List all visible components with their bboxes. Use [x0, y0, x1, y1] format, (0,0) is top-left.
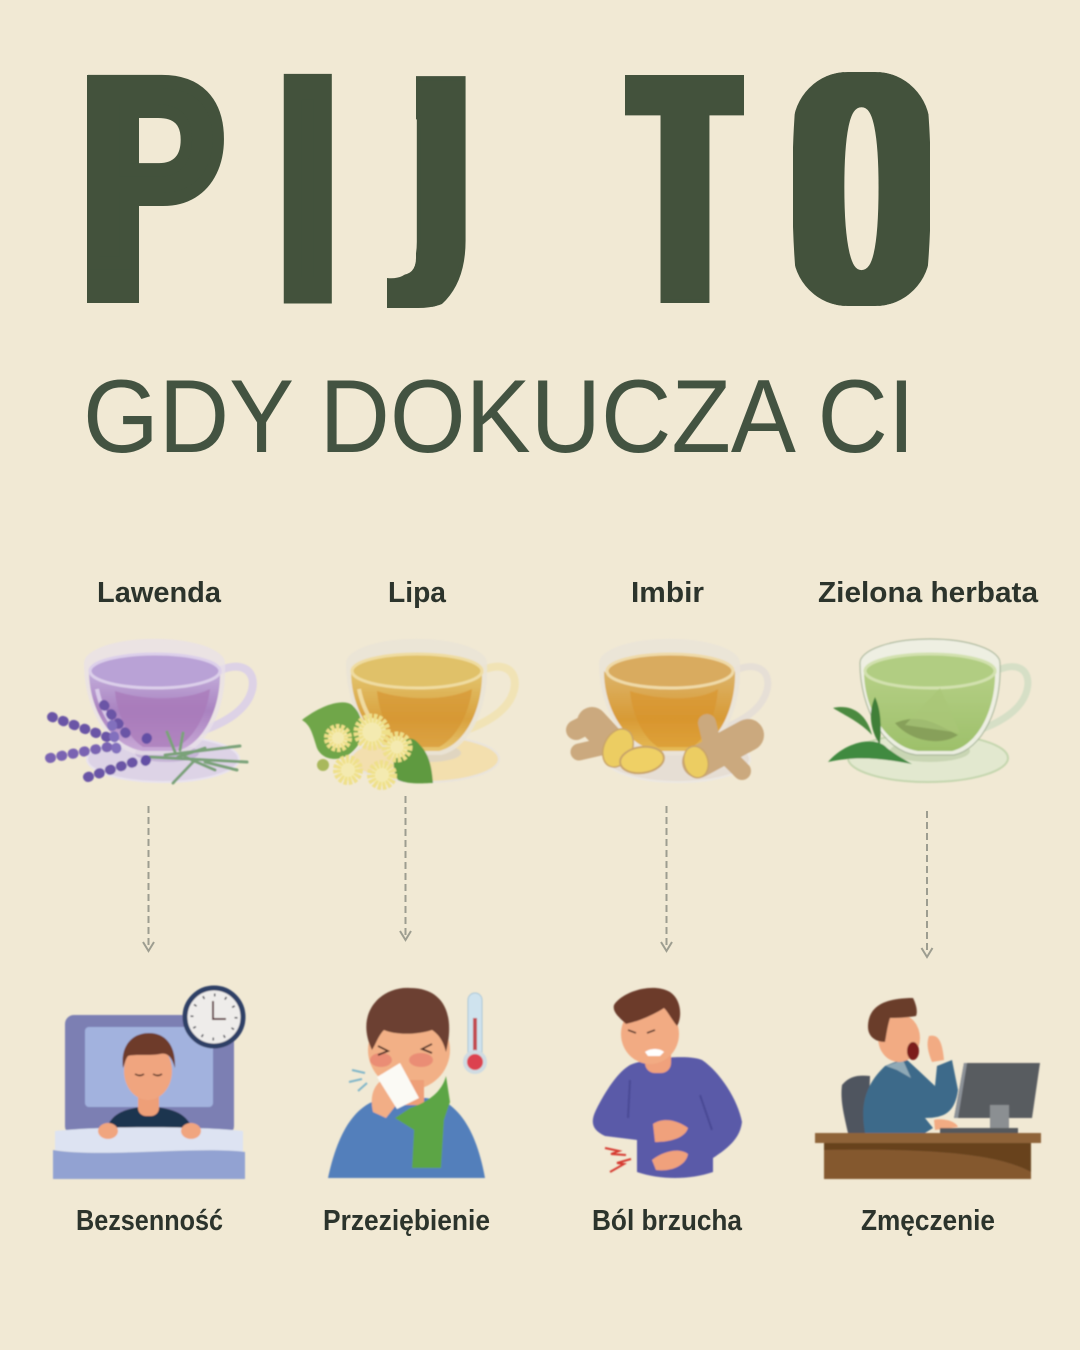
label: Zmęczenie: Zmęczenie — [861, 1205, 995, 1237]
title: PIJ TO: I — [279, 24, 337, 354]
label: Zielona herbata: Zielona herbata — [818, 577, 1039, 609]
thermometer — [463, 993, 487, 1074]
icon: man in bed with clock — [53, 988, 245, 1179]
label: Ból brzucha: Ból brzucha — [592, 1205, 743, 1237]
label: Imbir: Imbir — [631, 577, 704, 609]
icon: tired man at desk — [815, 998, 1041, 1179]
title: PIJ TO — [87, 72, 930, 308]
icon: linden tea cup — [302, 639, 515, 786]
label: Lipa: Lipa — [388, 577, 447, 609]
linden flowers — [328, 718, 408, 786]
ginger root right — [698, 723, 748, 771]
icon: man with stomach ache — [593, 988, 742, 1178]
rosemary sprig — [150, 732, 247, 783]
title: PIJ TO: P — [79, 25, 226, 319]
label: Lawenda: Lawenda — [97, 577, 222, 609]
arrow: Lipa to Przeziębienie — [400, 796, 411, 940]
icon: ginger tea cup — [576, 639, 768, 782]
arrow: Imbir to Ból brzucha — [661, 806, 672, 951]
subtitle: GDY DOKUCZA CI: GDY DOKUCZA CI — [83, 359, 915, 475]
label: Przeziębienie: Przeziębienie — [323, 1205, 490, 1237]
arrow: Zielona herbata to Zmęczenie — [922, 811, 932, 957]
title: PIJ TO: J — [311, 4, 485, 389]
icon: green tea cup — [828, 639, 1028, 782]
icon: sick man with tissue and thermometer — [328, 988, 487, 1178]
linden leaves — [302, 702, 361, 759]
title: PIJ TO: T — [589, 6, 781, 371]
arrow: Lawenda to Bezsenność — [143, 806, 154, 951]
lavender flowers — [50, 705, 147, 777]
clock — [185, 988, 243, 1046]
icon: lavender tea cup — [50, 639, 253, 783]
label: Bezsenność: Bezsenność — [76, 1205, 223, 1237]
tea leaves — [833, 707, 872, 735]
ginger root left — [576, 722, 618, 752]
